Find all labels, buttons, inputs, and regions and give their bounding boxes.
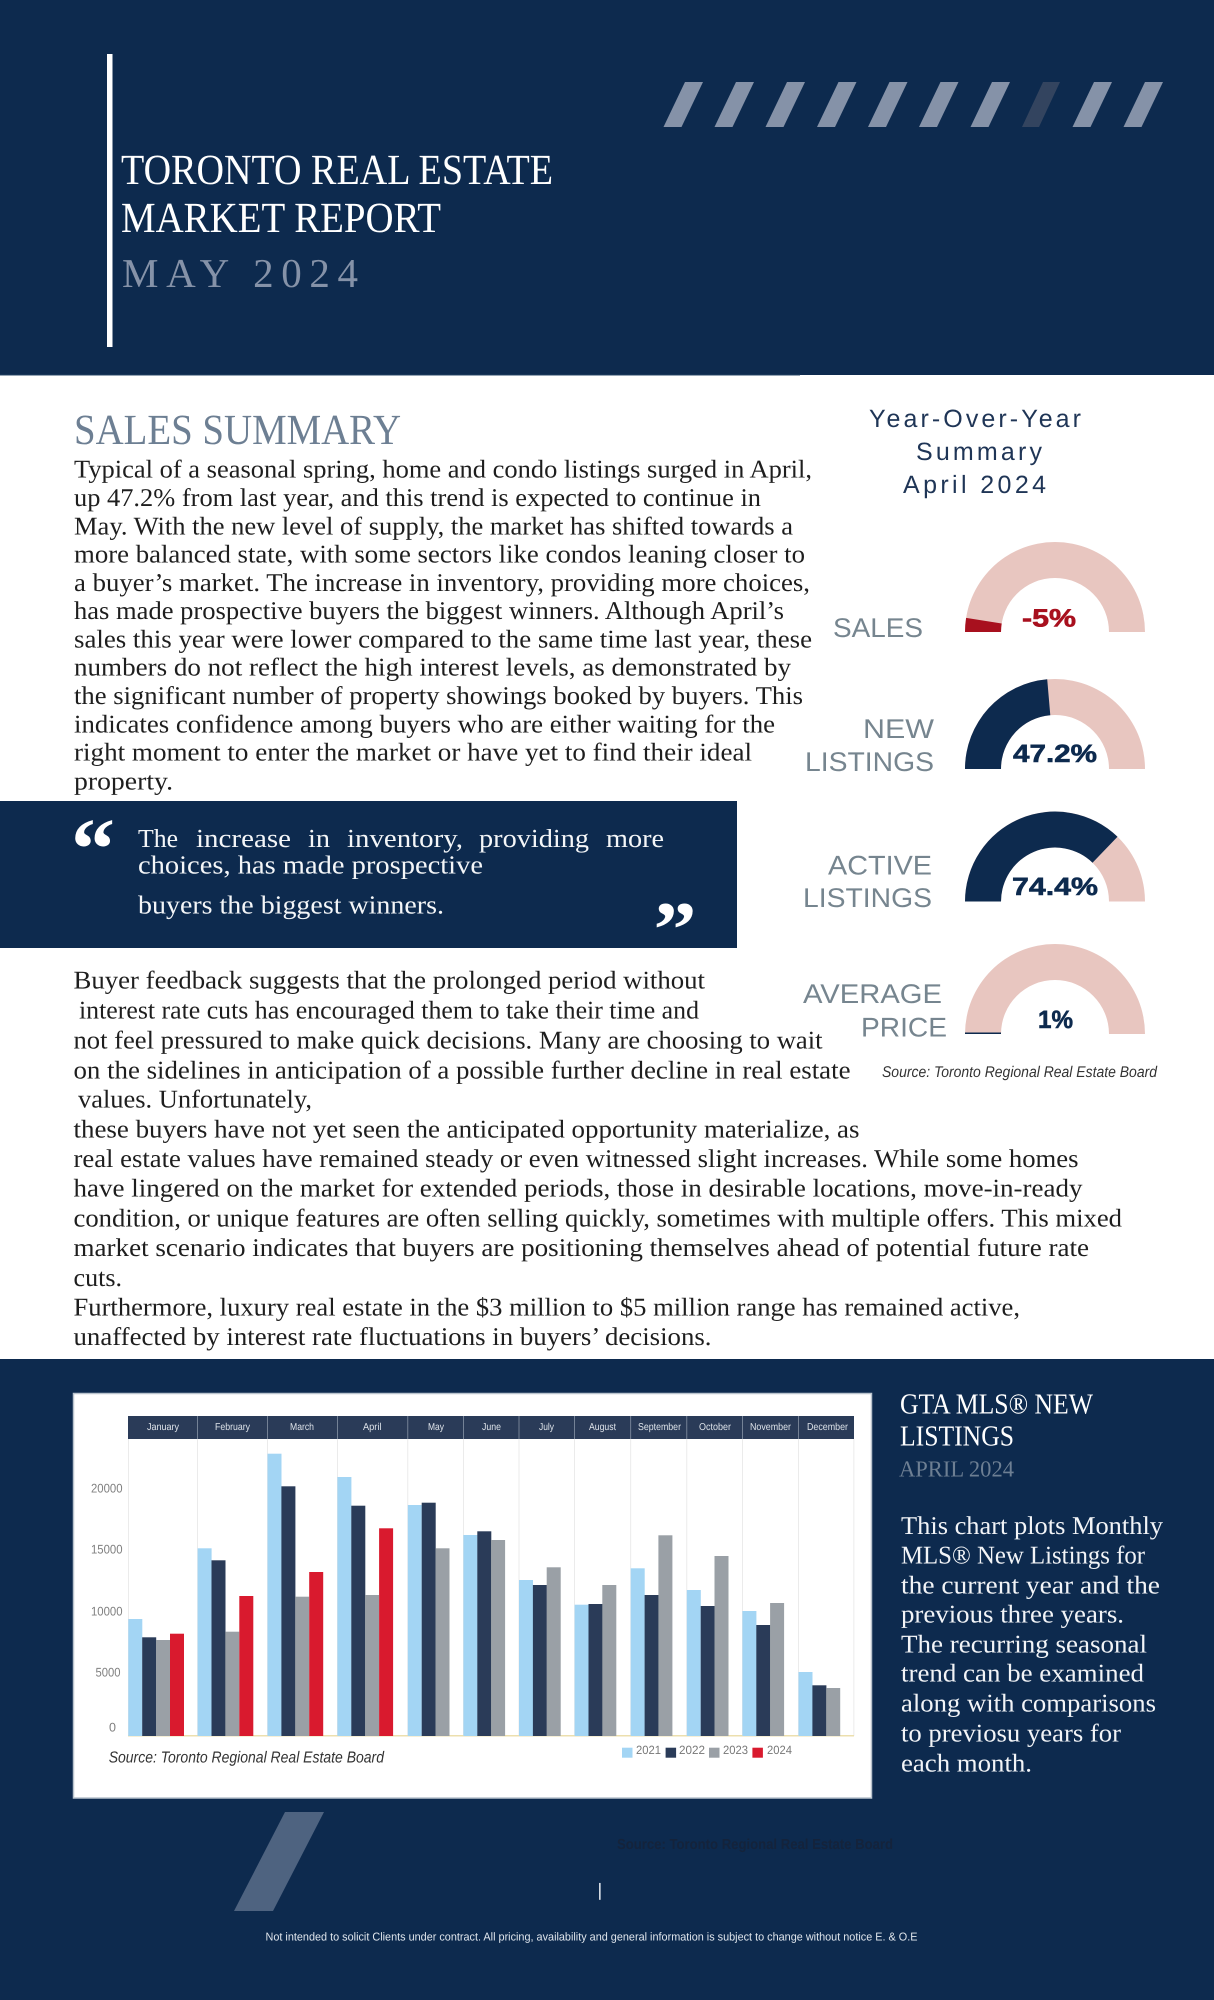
text block: chart description: along with comparisons	[901, 1689, 1156, 1718]
panel: header band	[0, 0, 1214, 376]
text block: buyer feedback paragraph: interest rate cuts has encouraged them to take their time and	[79, 995, 699, 1024]
chart legend: 2024	[767, 1743, 792, 1757]
heading: year-over-year summary: Year-Over-Year	[869, 405, 1081, 433]
text block: chart description: This chart plots Monthly	[901, 1511, 1163, 1540]
quote text: increase	[196, 824, 291, 853]
chart header: months	[128, 1416, 854, 1439]
chart header: months: February	[215, 1422, 250, 1433]
quote text: The	[138, 824, 178, 853]
text block: sales summary paragraph: Typical of a seasonal spring, home and condo listings surged in April,	[74, 455, 812, 484]
chart header: months: August	[589, 1422, 616, 1433]
decorative slash	[234, 1812, 324, 1911]
chart legend	[622, 1743, 792, 1758]
gauge: average price: PRICE	[861, 1012, 947, 1042]
chart header: months: March	[290, 1422, 314, 1433]
gauge: active listings	[803, 812, 1145, 913]
text block: chart description: MLS® New Listings for	[901, 1540, 1145, 1569]
gauge: new listings	[805, 679, 1145, 777]
title	[121, 147, 553, 242]
heading: GTA MLS new listings	[899, 1388, 1094, 1482]
heading: GTA MLS new listings: LISTINGS	[900, 1421, 1014, 1453]
y axis labels: 0	[109, 1720, 116, 1734]
chart header: months: January	[147, 1422, 179, 1433]
gauge: sales: SALES	[833, 613, 923, 643]
text block: sales summary paragraph: numbers do not reflect the high interest levels, as demonstrated by	[74, 653, 791, 682]
heading: sales summary: SALES SUMMARY	[74, 407, 401, 454]
text block: sales summary paragraph: has made prospective buyers the biggest winners. Although April’s	[74, 596, 784, 625]
chart header: months: June	[482, 1422, 501, 1433]
y axis labels: 15000	[91, 1542, 123, 1556]
subtitle: date: MAY 2024	[122, 250, 358, 296]
text block: chart description: each month.	[901, 1749, 1032, 1778]
text block: buyer feedback paragraph: not feel pressured to make quick decisions. Many are choosing to wait	[74, 1025, 823, 1054]
icon: closing quotation mark: ”	[654, 887, 696, 974]
y axis labels: 20000	[91, 1482, 123, 1496]
source note: chart: Source: Toronto Regional Real Estate Board	[109, 1750, 385, 1767]
gauge: active listings: LISTINGS	[803, 883, 932, 913]
quote text: inventory,	[347, 824, 463, 853]
bar chart: monthly new listings	[91, 1416, 854, 1736]
bars: 2024	[170, 1528, 393, 1736]
chart header: months: December	[807, 1422, 849, 1433]
gauge: new listings: LISTINGS	[805, 747, 934, 777]
chart header: months: September	[638, 1422, 682, 1433]
text block: buyer feedback paragraph: cuts.	[74, 1263, 122, 1292]
heading: year-over-year summary: Summary	[916, 438, 1042, 466]
text block: sales summary paragraph: indicates confidence among buyers who are either waiting for the	[74, 709, 775, 738]
gauge: active listings: 74.4%	[1012, 873, 1098, 901]
text block: chart description: The recurring seasonal	[901, 1630, 1147, 1659]
chart header: months: May	[428, 1422, 444, 1433]
title: MARKET REPORT	[121, 195, 441, 242]
text block: buyer feedback paragraph: these buyers have not yet seen the anticipated opportunity materialize, as	[74, 1114, 860, 1143]
title accent bar	[107, 54, 112, 347]
quote text: in	[308, 824, 330, 853]
quote text: choices, has made prospective	[138, 850, 483, 879]
text block: buyer feedback paragraph	[74, 965, 1122, 1351]
gauge: active listings: ACTIVE	[828, 850, 932, 880]
quote text: more	[606, 824, 664, 853]
text block: buyer feedback paragraph: Furthermore, luxury real estate in the $3 million to $5 million range has remained active,	[74, 1293, 1020, 1322]
y axis labels	[91, 1482, 123, 1734]
gauge: new listings: 47.2%	[1013, 740, 1097, 768]
text block: buyer feedback paragraph: condition, or unique features are often selling quickly, sometimes with multiple offers. This mixed	[74, 1204, 1122, 1233]
text block: sales summary paragraph	[74, 455, 812, 795]
text block: chart description: to previosu years for	[901, 1719, 1122, 1748]
text block: chart description: previous three years.	[901, 1600, 1124, 1629]
heading: GTA MLS new listings: APRIL 2024	[899, 1457, 1014, 1482]
quote text	[138, 824, 664, 919]
gauge: average price: AVERAGE	[803, 979, 942, 1009]
text block: chart description: the current year and the	[901, 1570, 1160, 1599]
bars: 2021	[128, 1454, 813, 1736]
panel: lower navy section	[0, 1359, 1214, 2000]
chart header: months: April	[363, 1422, 382, 1433]
heading: year-over-year summary: April 2024	[903, 471, 1046, 499]
gauge: sales	[833, 542, 1145, 643]
chart header: months: October	[699, 1422, 732, 1433]
chart legend: 2023	[723, 1743, 748, 1757]
text block: sales summary paragraph: more balanced state, with some sectors like condos leaning closer to	[74, 540, 805, 569]
heading: year-over-year summary	[869, 405, 1081, 499]
title: TORONTO REAL ESTATE	[121, 147, 553, 194]
gauge: sales: -5%	[1022, 604, 1076, 632]
y axis labels: 5000	[96, 1666, 121, 1680]
gauge: average price: 1%	[1038, 1006, 1073, 1034]
text block: chart description: trend can be examined	[901, 1659, 1144, 1688]
footer disclaimer: Not intended to solicit Clients under contract. All pricing, availability and general information is subject to change without notice E. & O.E	[266, 1932, 918, 1944]
chart header: months: July	[539, 1422, 554, 1433]
gauge: average price	[803, 944, 1145, 1042]
chart legend: 2022	[679, 1743, 705, 1757]
text block: sales summary paragraph: property.	[74, 766, 173, 795]
text block: sales summary paragraph: a buyer’s market. The increase in inventory, providing more choices,	[74, 568, 810, 597]
bars: 2023	[156, 1535, 840, 1736]
text block: buyer feedback paragraph: have lingered on the market for extended periods, those in desirable locations, move-in-ready	[74, 1174, 1083, 1203]
text block: sales summary paragraph: sales this year were lower compared to the same time last year, these	[74, 624, 812, 653]
panel: chart card	[74, 1394, 872, 1798]
bars: 2022	[142, 1486, 826, 1736]
text block: sales summary paragraph: the significant number of property showings booked by buyers. This	[74, 681, 803, 710]
text block: buyer feedback paragraph: values. Unfortunately,	[78, 1085, 312, 1114]
text block: sales summary paragraph: right moment to enter the market or have yet to find their ideal	[74, 738, 752, 767]
text block: sales summary paragraph: May. With the new level of supply, the market has shifted towards a	[74, 511, 793, 540]
text block: sales summary paragraph: up 47.2% from last year, and this trend is expected to continue in	[74, 483, 761, 512]
quote text: providing	[479, 824, 589, 853]
heading: GTA MLS new listings: GTA MLS® NEW	[900, 1388, 1094, 1420]
text block: buyer feedback paragraph: Buyer feedback suggests that the prolonged period without	[74, 965, 705, 994]
y axis labels: 10000	[91, 1604, 123, 1618]
callout: pull quote	[0, 800, 737, 974]
icon: decorative slashes	[664, 82, 1163, 127]
text block: buyer feedback paragraph: unaffected by interest rate fluctuations in buyers’ decisions.	[74, 1322, 712, 1351]
text block: buyer feedback paragraph: on the sidelines in anticipation of a possible further decline in real estate	[74, 1055, 851, 1084]
hidden-tone source note: Source: Toronto Regional Real Estate Board	[617, 1837, 893, 1853]
footer divider glyph: |	[598, 1880, 602, 1900]
source note: gauges: Source: Toronto Regional Real Estate Board	[882, 1064, 1158, 1081]
chart legend: 2021	[636, 1743, 661, 1757]
chart header: months: November	[750, 1422, 792, 1433]
icon: opening quotation mark: “	[71, 800, 115, 897]
text block: buyer feedback paragraph: market scenario indicates that buyers are positioning themselves ahead of potential future rate	[74, 1233, 1089, 1262]
gauge: new listings: NEW	[863, 714, 935, 744]
text block: chart description	[901, 1511, 1163, 1778]
text block: buyer feedback paragraph: real estate values have remained steady or even witnessed slight increases. While some homes	[74, 1144, 1078, 1173]
quote text: buyers the biggest winners.	[138, 890, 444, 919]
